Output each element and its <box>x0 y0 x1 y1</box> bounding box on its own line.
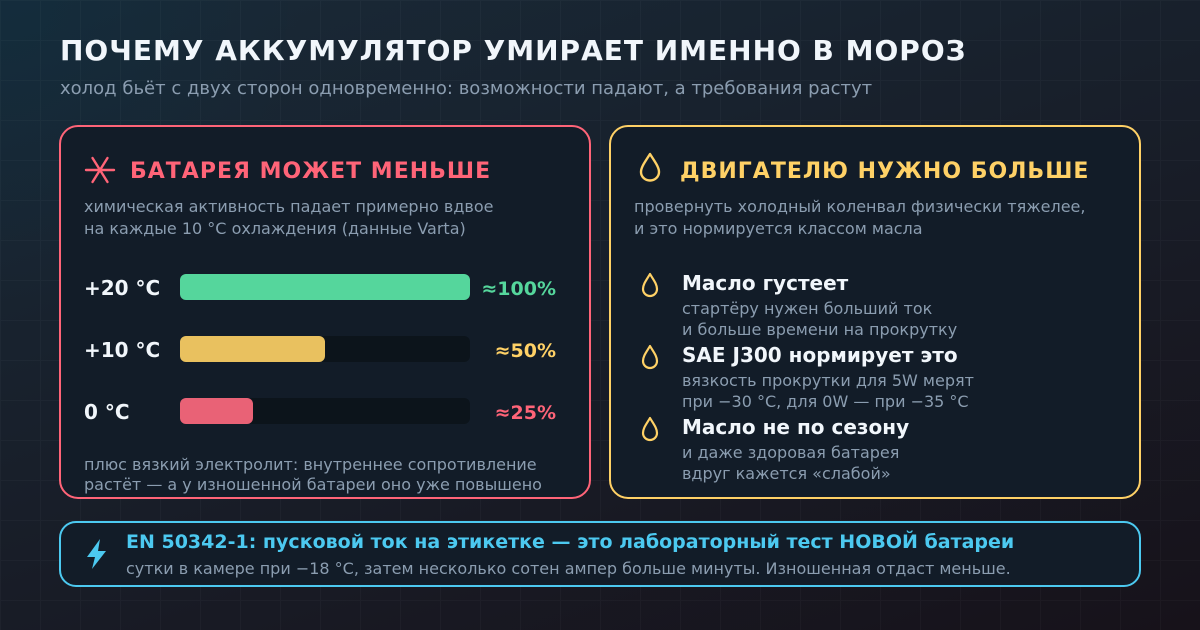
bar row: 0 °C: ≈25% <box>495 402 556 424</box>
panel heading: battery: БАТАРЕЯ МОЖЕТ МЕНЬШЕ <box>130 159 491 184</box>
bar row: 0 °C: 0 °C <box>84 400 130 424</box>
bar row: +20 °C <box>84 274 556 300</box>
bar row: +20 °C: ≈100% <box>481 278 556 300</box>
icon: oil drop <box>641 154 659 180</box>
item: wrong-season oil <box>643 415 909 483</box>
subtitle: холод бьёт с двух сторон одновременно: возможности падают, а требования растут <box>60 78 872 99</box>
panel: engine needs more <box>610 126 1140 498</box>
bar row: +10 °C: ≈50% <box>495 340 556 362</box>
item: SAE J300: при −30 °C, для 0W — при −35 °C <box>682 392 969 411</box>
panel: battery can do less <box>60 126 590 498</box>
title: ПОЧЕМУ АККУМУЛЯТОР УМИРАЕТ ИМЕННО В МОРОЗ <box>60 34 967 67</box>
panel note: electrolyte: плюс вязкий электролит: внутреннее сопротивление <box>84 455 537 474</box>
item: oil thickens: и больше времени на прокрутку <box>682 320 957 339</box>
callout body: сутки в камере при −18 °C, затем несколько сотен ампер больше минуты. Изношенная отдаст меньше. <box>126 559 1011 578</box>
panel description: battery <box>84 197 493 238</box>
icon: lightning bolt <box>87 539 106 569</box>
panel description: engine: и это нормируется классом масла <box>634 219 923 238</box>
icon: snowflake <box>86 158 114 182</box>
item: wrong-season oil: вдруг кажется «слабой» <box>682 464 891 483</box>
panel note: electrolyte: растёт — а у изношенной батареи оно уже повышено <box>84 475 542 494</box>
callout heading: EN 50342-1: пусковой ток на этикетке — это лабораторный тест НОВОЙ батареи <box>126 530 1014 553</box>
item: oil thickens: стартёру нужен больший ток <box>682 299 933 318</box>
item: oil thickens <box>643 271 957 339</box>
panel note: electrolyte <box>84 455 542 494</box>
item: SAE J300: SAE J300 нормирует это <box>682 343 958 367</box>
bar row: +10 °C: +10 °C <box>84 338 160 362</box>
bar row: 0 °C <box>84 398 556 424</box>
panel description: battery: на каждые 10 °C охлаждения (данные Varta) <box>84 219 466 238</box>
item: wrong-season oil: и даже здоровая батарея <box>682 443 899 462</box>
panel description: engine: провернуть холодный коленвал физически тяжелее, <box>634 197 1085 216</box>
item: wrong-season oil: Масло не по сезону <box>682 415 909 439</box>
bar row: +20 °C: +20 °C <box>84 276 160 300</box>
item: oil thickens: Масло густеет <box>682 271 849 295</box>
bar row: +10 °C <box>84 336 556 362</box>
panel description: engine <box>634 197 1085 238</box>
item: SAE J300 <box>643 343 974 411</box>
item: SAE J300: вязкость прокрутки для 5W мерят <box>682 371 974 390</box>
panel heading: engine: ДВИГАТЕЛЮ НУЖНО БОЛЬШЕ <box>680 159 1089 184</box>
callout: EN 50342-1 <box>60 522 1140 586</box>
panel description: battery: химическая активность падает примерно вдвое <box>84 197 493 216</box>
